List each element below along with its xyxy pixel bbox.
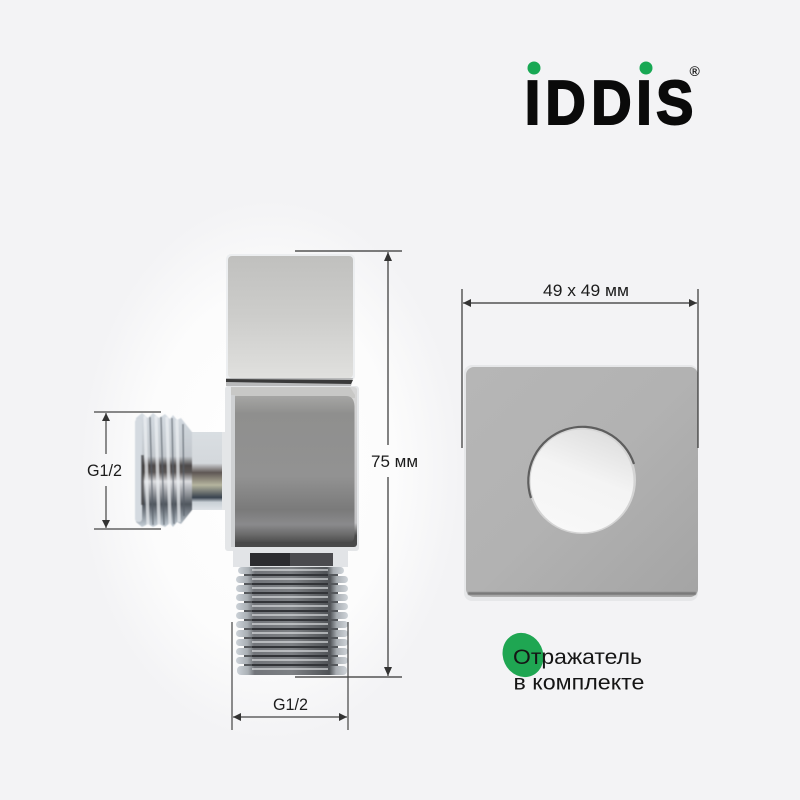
green accent blob [495, 626, 551, 684]
valve: joint shadow [226, 378, 353, 386]
valve: collar [233, 550, 348, 567]
caption: reflector included: Отражатель [513, 646, 642, 669]
dimension: plate width 49 x 49 mm [462, 289, 698, 448]
valve: lower body [225, 386, 359, 551]
logo: IDDIS: ® [690, 63, 700, 79]
label: 75 mm: 75 мм [371, 453, 418, 471]
label: 49 x 49 mm: 49 х 49 мм [543, 282, 629, 300]
left thread [135, 413, 192, 527]
label: left G1/2: G1/2 [87, 462, 122, 480]
dimension: bottom G1/2 [232, 622, 348, 730]
caption: reflector included: в комплекте [514, 672, 644, 694]
label: bottom G1/2: G1/2 [273, 696, 308, 714]
reflector plate [464, 365, 698, 601]
valve: left threaded outlet [135, 413, 228, 527]
logo: IDDIS: IDDIS [525, 69, 693, 138]
dimension: left G1/2 [94, 412, 161, 529]
left connector tube [190, 432, 228, 510]
plate hole [528, 426, 636, 534]
valve: top square handle [226, 254, 355, 381]
dimension: valve height 75 mm [295, 251, 402, 677]
valve: bottom thread [236, 567, 348, 675]
